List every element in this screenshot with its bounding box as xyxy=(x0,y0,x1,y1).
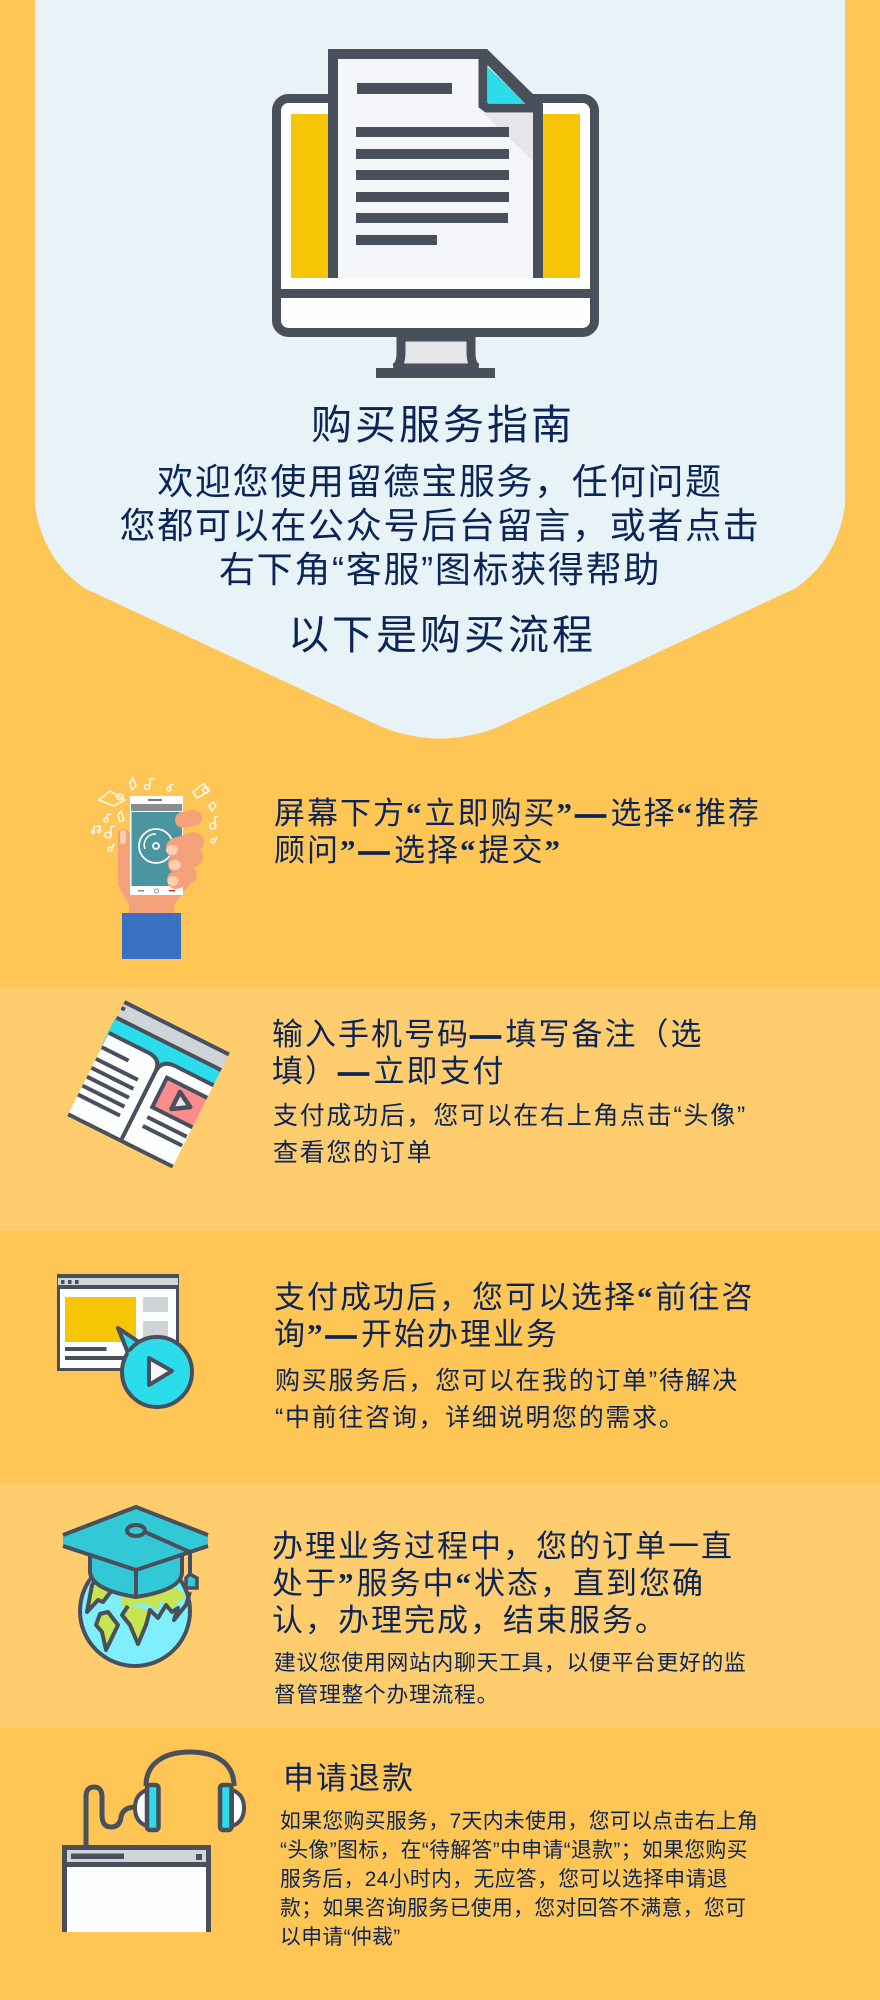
step 2 heading xyxy=(272,1017,704,1089)
icon: headphones and window xyxy=(62,1750,246,1932)
refund note: 服务后，24小时内，无应答，您可以选择申请退 xyxy=(280,1868,728,1891)
step 4 heading: 认，办理完成，结束服务。 xyxy=(272,1603,668,1638)
step 3 note xyxy=(275,1367,739,1432)
intro text: 欢迎您使用留德宝服务，任何问题 xyxy=(157,461,723,502)
step 3 note: 购买服务后，您可以在我的订单”待解决 xyxy=(275,1367,739,1395)
band: step 2 background xyxy=(0,988,880,1231)
step 4 note: 督管理整个办理流程。 xyxy=(274,1682,499,1707)
step 3 text xyxy=(274,1280,754,1432)
step 4 heading: 处于”服务中“状态，直到您确 xyxy=(272,1566,705,1601)
step 1 text xyxy=(274,796,761,868)
intro text xyxy=(120,461,760,590)
icon: document on monitor xyxy=(272,49,599,378)
step 1 text: 屏幕下方“立即购买”—选择“推荐 xyxy=(274,796,761,831)
step 3 heading xyxy=(274,1280,754,1352)
step 4 note xyxy=(274,1650,746,1707)
step 5 text xyxy=(280,1761,758,1949)
icon: video window with play bubble xyxy=(57,1274,194,1409)
step 2 heading: 输入手机号码—填写备注（选 xyxy=(272,1017,704,1052)
step 4 heading xyxy=(272,1529,734,1638)
subtitle: 以下是购买流程 xyxy=(288,612,596,658)
refund note: 以申请“仲裁” xyxy=(280,1926,401,1949)
step 1 text: 顾问”—选择“提交” xyxy=(274,833,563,868)
step 2 note xyxy=(273,1102,747,1166)
refund note: 如果您购买服务，7天内未使用，您可以点击右上角 xyxy=(280,1810,758,1833)
refund note: 款；如果咨询服务已使用，您对回答不满意，您可 xyxy=(280,1897,746,1920)
step 4 note: 建议您使用网站内聊天工具，以便平台更好的监 xyxy=(274,1650,746,1675)
step 3 heading: 支付成功后，您可以选择“前往咨 xyxy=(274,1280,754,1315)
icon: hand holding phone xyxy=(90,776,218,959)
step 4 text xyxy=(272,1529,746,1707)
refund note: “头像”图标，在“待解答”中申请“退款”；如果您购买 xyxy=(280,1839,748,1862)
band: step 4 background xyxy=(0,1483,880,1728)
step 2 text xyxy=(272,1017,747,1166)
step 4 heading: 办理业务过程中，您的订单一直 xyxy=(272,1529,734,1564)
intro text: 右下角“客服”图标获得帮助 xyxy=(219,549,661,590)
panel: header pentagon xyxy=(35,0,845,738)
step 3 note: “中前往咨询，详细说明您的需求。 xyxy=(275,1404,686,1432)
refund note xyxy=(280,1810,758,1949)
icon: graduation cap on globe xyxy=(62,1504,209,1668)
step 2 heading: 填）—立即支付 xyxy=(272,1054,506,1089)
step 2 note: 支付成功后，您可以在右上角点击“头像” xyxy=(273,1102,747,1130)
refund heading: 申请退款 xyxy=(283,1761,415,1796)
title: 购买服务指南 xyxy=(311,402,575,448)
step 2 note: 查看您的订单 xyxy=(273,1138,433,1166)
intro text: 您都可以在公众号后台留言，或者点击 xyxy=(120,505,760,546)
icon: tilted book with video xyxy=(67,1000,230,1168)
step 3 heading: 询”—开始办理业务 xyxy=(274,1317,559,1352)
